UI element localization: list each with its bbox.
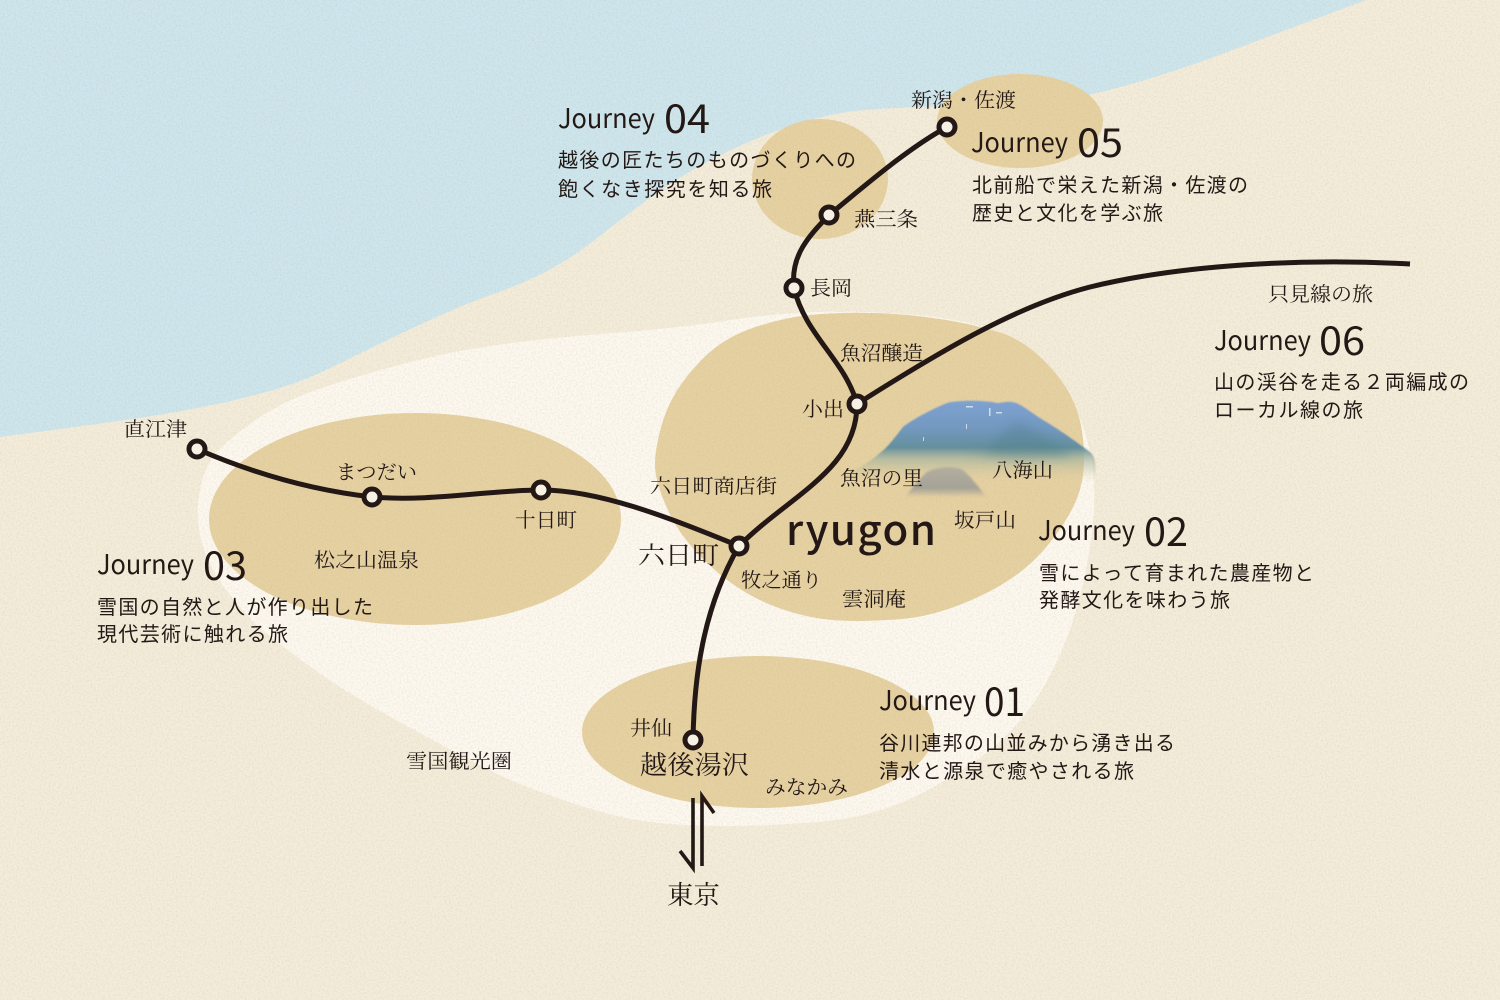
area ellipse: Journey 01 xyxy=(582,656,934,808)
arrow: Tokyo up and down xyxy=(680,796,714,868)
Journey 03 text: 雪国の自然と人が作り出した xyxy=(97,596,373,619)
Journey 01 text: 谷川連邦の山並みから湧き出る xyxy=(879,732,1175,755)
area ellipse: Journey 02 xyxy=(655,313,1084,621)
place names: 東京 xyxy=(667,881,720,910)
station: 燕三条 xyxy=(821,207,837,223)
area ellipse: Journey 03 xyxy=(209,413,621,625)
Journey 04 text xyxy=(558,89,856,201)
mountain: Hakkaisan xyxy=(845,401,1096,497)
place names: 井仙 xyxy=(630,717,672,740)
place names: 長岡 xyxy=(810,277,852,300)
Journey 05 text: Journey xyxy=(971,121,1068,160)
mountain: Sakadoyama xyxy=(905,467,988,497)
logo: ryugon: ryugon xyxy=(786,497,936,558)
place names: 直江津 xyxy=(124,418,187,441)
Journey 01 text: Journey xyxy=(879,679,976,718)
area ellipse: Journey 04 xyxy=(752,119,888,239)
station: 六日町 xyxy=(731,538,747,554)
place names xyxy=(124,89,1373,910)
Journey 03 text: 03 xyxy=(203,536,247,592)
area ellipse: Journey 05 xyxy=(937,74,1103,168)
Journey 01 text xyxy=(879,672,1175,783)
Journey 05 text: 歴史と文化を学ぶ旅 xyxy=(972,202,1163,225)
Journey 03 text: 現代芸術に触れる旅 xyxy=(97,623,288,646)
Journey 02 text: 発酵文化を味わう旅 xyxy=(1039,589,1230,612)
Journey 01 text: 01 xyxy=(984,672,1025,728)
Journey 02 text: 雪によって育まれた農産物と xyxy=(1039,562,1314,585)
station: 十日町 xyxy=(533,482,549,498)
Journey 04 text: Journey xyxy=(558,97,655,136)
Journey 05 text: 北前船で栄えた新潟・佐渡の xyxy=(972,174,1248,197)
place names: 六日町商店街 xyxy=(650,475,777,498)
station: 新潟・佐渡 xyxy=(939,119,955,135)
place names: 牧之通り xyxy=(741,569,822,592)
Journey 05 text xyxy=(971,113,1248,225)
station: 長岡 xyxy=(786,280,802,296)
place names: 八海山 xyxy=(992,459,1053,482)
Journey 06 text xyxy=(1214,311,1469,422)
place names: みなかみ xyxy=(765,777,848,799)
station: まつだい xyxy=(364,489,380,505)
Journey 06 text: 06 xyxy=(1319,311,1365,367)
place names: 雪国観光圏 xyxy=(406,750,512,773)
Journey 04 text: 飽くなき探究を知る旅 xyxy=(558,178,772,201)
railway lines xyxy=(197,127,1410,740)
place names: 十日町 xyxy=(515,509,577,532)
Journey 03 text: Journey xyxy=(97,543,194,582)
place names: 松之山温泉 xyxy=(314,549,419,572)
station: 直江津 xyxy=(189,441,205,457)
place names: 新潟・佐渡 xyxy=(911,89,1016,112)
place names: 魚沼醸造 xyxy=(840,342,923,365)
place names: 六日町 xyxy=(638,543,719,570)
place names: 雲洞庵 xyxy=(842,588,906,611)
Journey 04 text: 越後の匠たちのものづくりへの xyxy=(558,149,856,172)
place names: 小出 xyxy=(802,398,844,421)
Journey 04 text: 04 xyxy=(664,89,710,145)
Journey 02 text xyxy=(1038,502,1314,612)
Journey 01 text: 清水と源泉で癒やされる旅 xyxy=(879,760,1134,783)
place names: 越後湯沢 xyxy=(640,751,749,780)
Journey 03 text xyxy=(97,536,373,646)
Journey 02 text: Journey xyxy=(1038,509,1135,548)
place names: まつだい xyxy=(336,462,417,484)
Journey 06 text: Journey xyxy=(1214,319,1311,358)
Journey 06 text: 山の渓谷を走る２両編成の xyxy=(1214,371,1469,394)
sea xyxy=(0,0,1366,437)
Journey 06 text: ローカル線の旅 xyxy=(1214,399,1363,422)
snow country tourism area xyxy=(198,311,1094,826)
Journey 02 text: 02 xyxy=(1144,502,1188,558)
station: 越後湯沢 xyxy=(685,732,701,748)
station: 小出 xyxy=(849,396,865,412)
place names: 坂戸山 xyxy=(954,509,1016,532)
place names: 燕三条 xyxy=(854,208,918,231)
place names: 魚沼の里 xyxy=(840,467,923,490)
Journey 05 text: 05 xyxy=(1077,113,1123,169)
place names: 只見線の旅 xyxy=(1268,283,1373,306)
